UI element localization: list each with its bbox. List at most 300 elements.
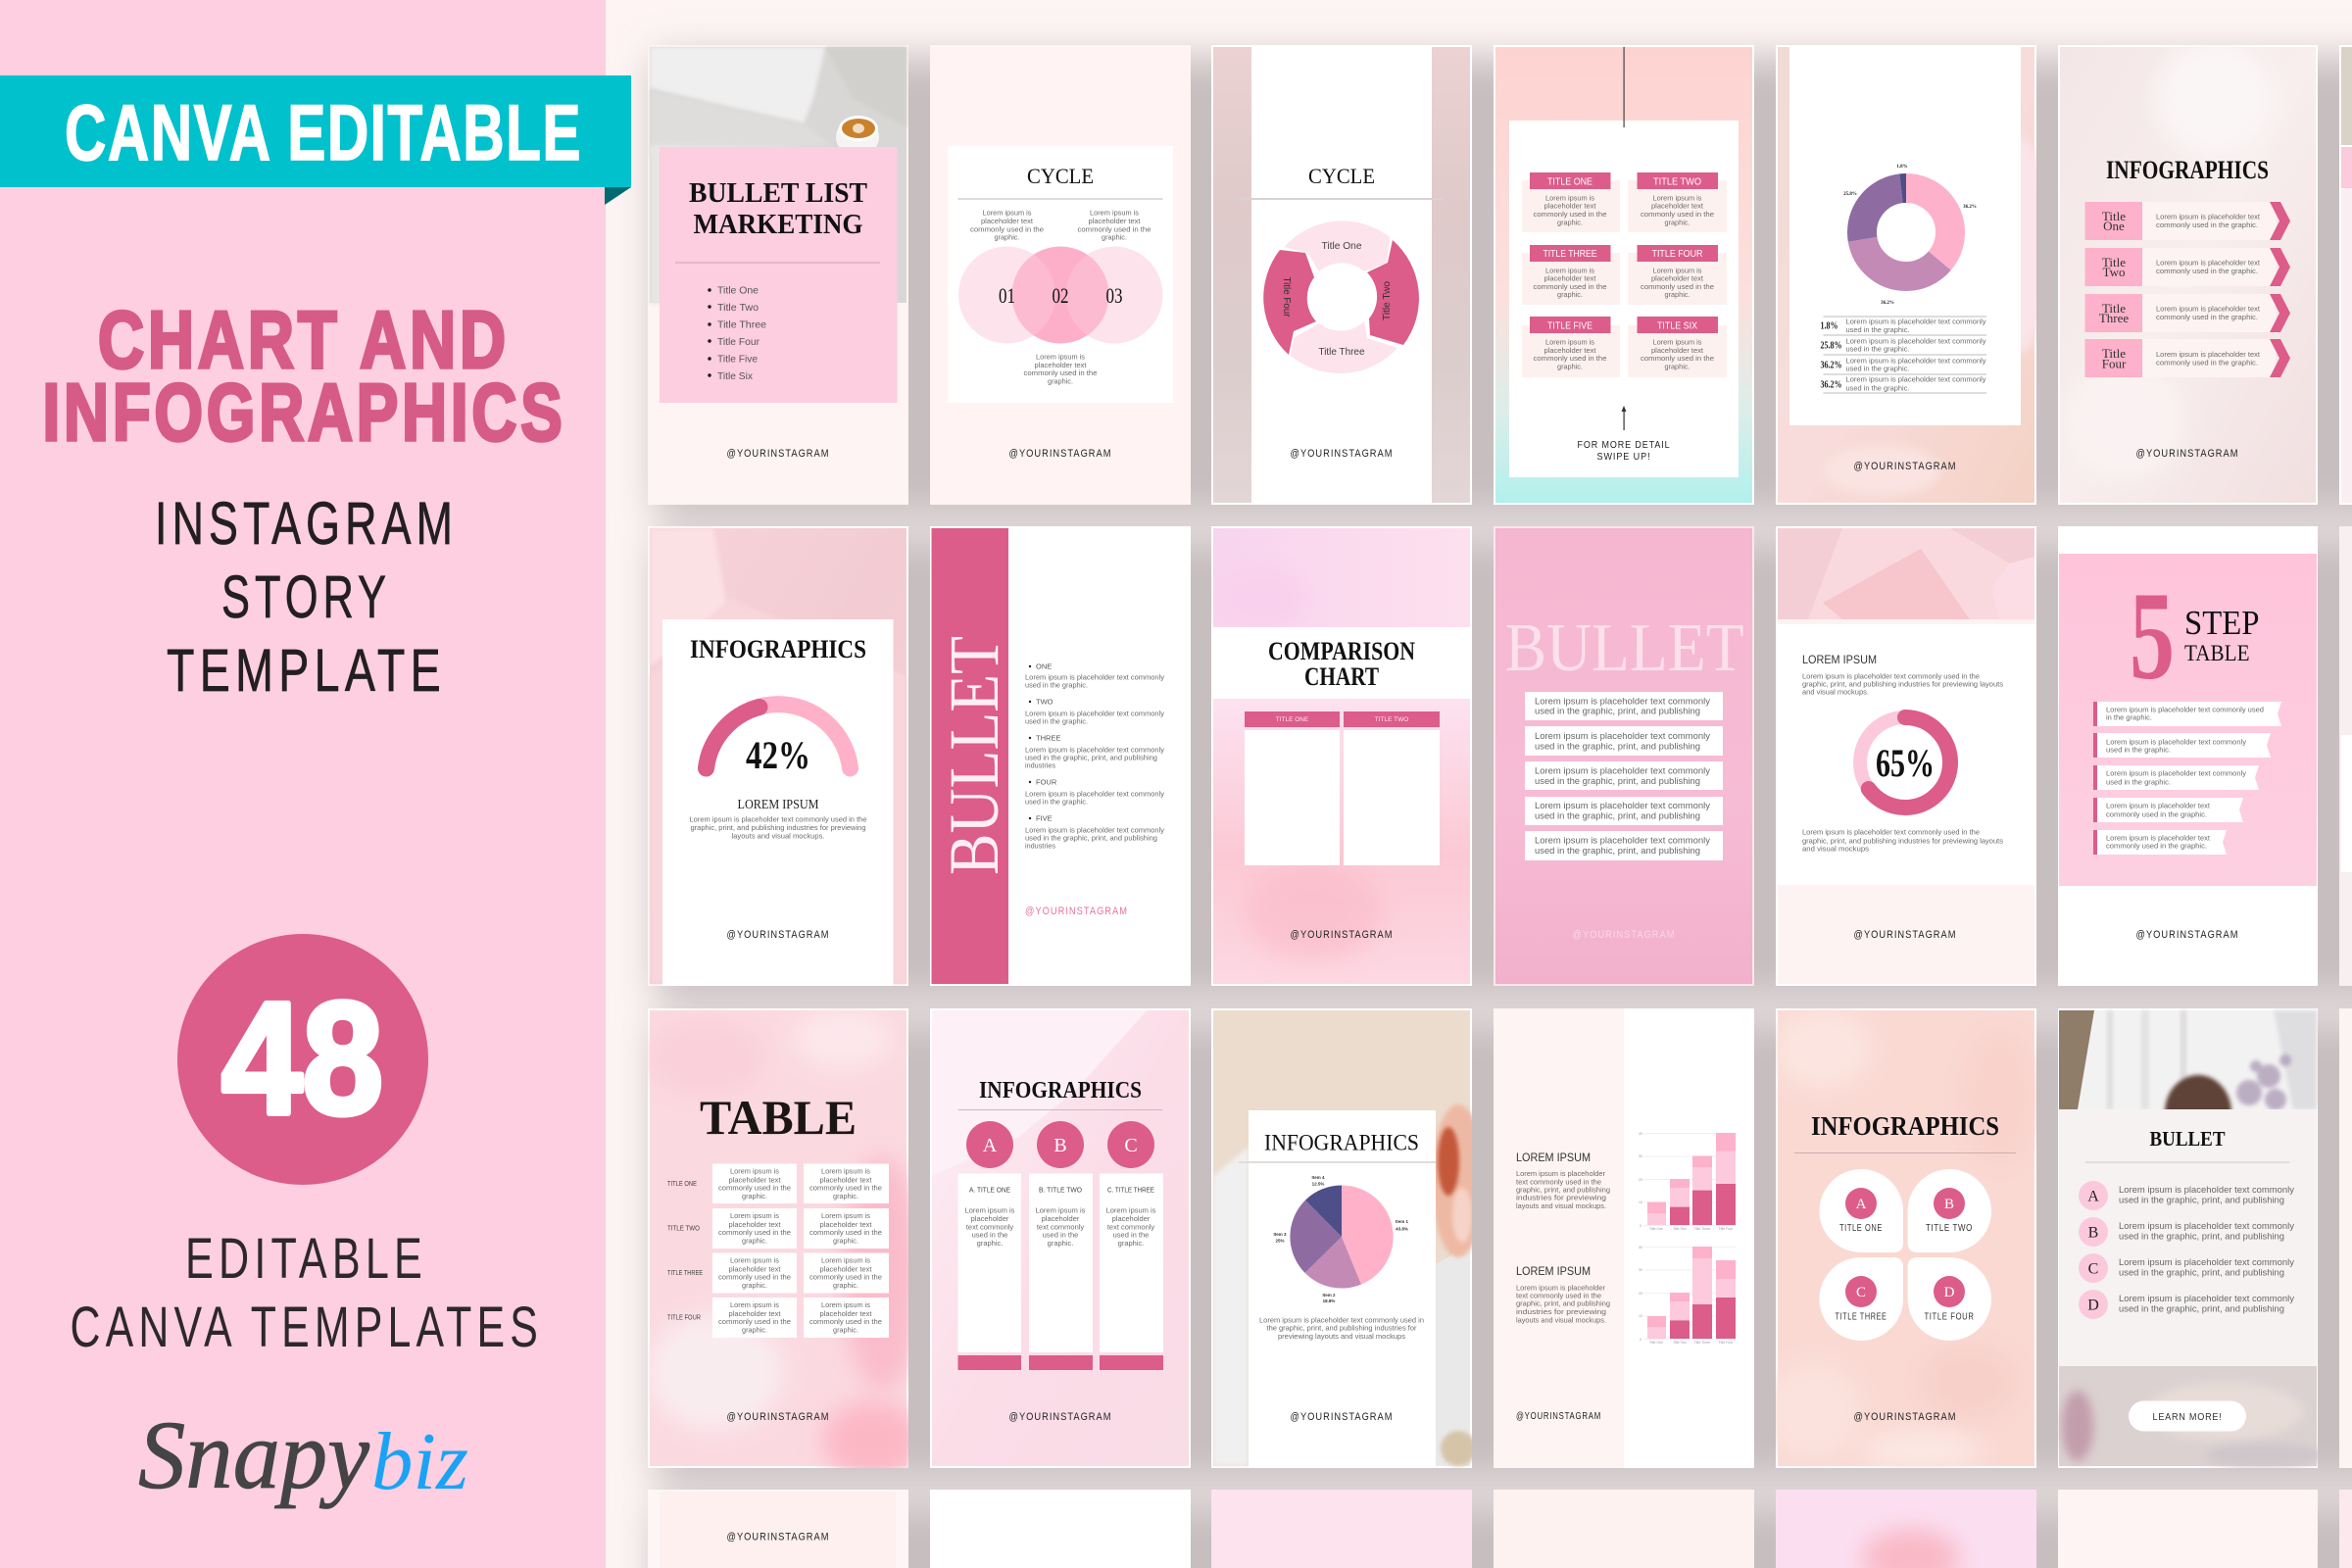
panel: template 3 arrow cycle	[1211, 45, 1472, 505]
six title cards: graphic.	[1664, 290, 1690, 299]
peach photo background	[1778, 47, 2050, 503]
bed photo	[2059, 1366, 2323, 1467]
table cells: commonly used in the	[809, 1272, 882, 1282]
description	[1259, 1315, 1424, 1341]
description top	[1802, 672, 2003, 696]
six title cards: TITLE TWO	[1653, 176, 1701, 188]
soft pink background	[932, 1010, 1189, 1466]
bullet list: Title One	[717, 286, 759, 296]
bullet list: FOUR	[1036, 778, 1057, 786]
table cells: commonly used in the	[718, 1184, 791, 1192]
table cells: graphic.	[742, 1192, 767, 1200]
panel: template 11 ring 65 percent	[1776, 526, 2036, 986]
three columns: placeholder	[971, 1214, 1009, 1223]
footer band	[1778, 885, 2034, 984]
comparison table	[1245, 711, 1440, 865]
arrow rows: Title	[2102, 346, 2126, 361]
title: INFOGRAPHICS	[1811, 1111, 1999, 1141]
table cells: placeholder text	[729, 1309, 781, 1318]
lettered rows: B	[2088, 1225, 2098, 1241]
stacked bar chart one: 0	[1640, 1224, 1642, 1228]
table cells: commonly used in the	[718, 1228, 791, 1237]
text blocks: placeholder text	[1035, 361, 1087, 369]
lettered rows: C	[2088, 1260, 2098, 1278]
table cells: commonly used in the	[718, 1317, 791, 1326]
bullet list: used in the graphic, print, and publishing	[1025, 753, 1157, 762]
title	[689, 177, 867, 240]
panel: row 4 template 2	[930, 1490, 1191, 1568]
text rows: Lorem ipsum is placeholder text commonly	[1535, 696, 1710, 708]
six title cards: TITLE FIVE	[1547, 321, 1592, 331]
panel: template 2 venn cycle	[930, 45, 1191, 505]
six title cards: graphic.	[1664, 218, 1690, 227]
title: BULLET	[2150, 1127, 2225, 1151]
bullet list: Title Three	[717, 319, 766, 331]
six title cards: commonly used in the	[1641, 210, 1714, 219]
pie labels	[1273, 1175, 1408, 1303]
text rows: Lorem ipsum is placeholder text commonly	[1535, 835, 1710, 847]
description: layouts and visual mockups.	[731, 831, 825, 841]
six title cards: commonly used in the	[1641, 282, 1714, 291]
watercolor backgrounds	[1213, 528, 1470, 984]
title: INFOGRAPHICS	[690, 635, 866, 663]
arrow rows: Four	[2102, 357, 2127, 370]
badge: 48 templates	[177, 934, 428, 1185]
six title cards: Lorem ipsum is	[1545, 194, 1594, 202]
subheading: instagram story template: STORY	[221, 564, 391, 630]
flag rows: in the graphic.	[2106, 713, 2152, 721]
text blocks: commonly used in the	[1078, 225, 1151, 233]
text rows: used in the graphic, print, and publishing	[1535, 741, 1700, 753]
silk background	[2060, 39, 2316, 503]
stacked bar chart one: 30	[1639, 1154, 1642, 1158]
stacked bar chart one: 20	[1639, 1178, 1642, 1182]
legend table: Lorem ipsum is placeholder text commonly	[1846, 374, 1986, 384]
three columns: text commonly	[1107, 1223, 1154, 1231]
lettered rows: used in the graphic, print, and publishing	[2119, 1196, 2284, 1205]
stacked bar chart one: Title One	[1649, 1227, 1663, 1231]
panel: template 1 bullet list marketing	[648, 45, 908, 505]
segmented cycle donut: Title One	[1321, 241, 1362, 252]
bullet list: Lorem ipsum is placeholder text commonly	[1025, 825, 1164, 835]
heading: chart and infographics	[43, 294, 566, 458]
bullet list: used in the graphic.	[1025, 717, 1088, 725]
stacked bar chart two: Title Three	[1694, 1341, 1710, 1345]
three columns: placeholder	[1042, 1214, 1080, 1223]
text blocks	[970, 208, 1151, 386]
handle: @YOURINSTAGRAM	[1290, 1411, 1394, 1423]
petal cards: B	[1944, 1197, 1954, 1212]
comparison table: TITLE TWO	[1375, 716, 1408, 723]
six title cards: Lorem ipsum is	[1652, 337, 1702, 347]
text: editable canva templates: EDITABLE	[185, 1227, 427, 1291]
venn diagram	[958, 247, 1162, 343]
six title cards: TITLE SIX	[1657, 321, 1697, 331]
petal cards: TITLE FOUR	[1925, 1311, 1974, 1323]
lettered rows: used in the graphic, print, and publishing	[2119, 1303, 2284, 1315]
arrow rows: Lorem ipsum is placeholder text	[2156, 259, 2261, 267]
table cells: commonly used in the	[718, 1272, 791, 1282]
panel: partial template column right row 3	[2339, 1008, 2352, 1468]
legend table: Lorem ipsum is placeholder text commonly	[1846, 318, 1986, 325]
legend table: used in the graphic.	[1846, 345, 1909, 353]
handle: @YOURINSTAGRAM	[1854, 461, 1956, 472]
bullet list: used in the graphic.	[1025, 680, 1088, 690]
vertical title: BULLET	[935, 636, 1013, 875]
pie labels: 18.8%	[1323, 1298, 1335, 1303]
text rows: used in the graphic, print, and publishing	[1535, 811, 1700, 821]
text blocks: graphic.	[994, 233, 1019, 241]
six title cards: commonly used in the	[1533, 210, 1607, 219]
description top: graphic, print, and publishing industries for previewing layouts	[1802, 680, 2003, 688]
gauge value: 42%	[746, 733, 810, 777]
six title cards: TITLE ONE	[1547, 176, 1592, 188]
six title cards: graphic.	[1557, 290, 1583, 299]
three columns: Lorem ipsum is	[1106, 1205, 1156, 1215]
six title cards: commonly used in the	[1533, 282, 1607, 291]
ribbon banner: CANVA EDITABLE	[65, 89, 582, 177]
legend table: 1.8%	[1821, 321, 1838, 331]
six title cards: graphic.	[1557, 218, 1583, 227]
table cells: graphic.	[833, 1192, 858, 1200]
subheading: instagram story template: TEMPLATE	[167, 637, 446, 704]
title: COMPARISON	[1268, 637, 1415, 665]
six title cards: Lorem ipsum is	[1652, 267, 1702, 274]
table cells: graphic.	[742, 1325, 767, 1335]
letter circles	[966, 1121, 1154, 1168]
arrow rows: commonly used in the graphic.	[2156, 359, 2258, 367]
table cells: placeholder text	[819, 1309, 872, 1318]
subheading: instagram story template: INSTAGRAM	[155, 490, 458, 557]
six title cards: TITLE THREE	[1543, 249, 1597, 260]
sand photo strips	[1213, 47, 1470, 503]
subheading: instagram story template	[155, 490, 458, 704]
title: TABLE	[2184, 641, 2250, 665]
arrow rows: Lorem ipsum is placeholder text	[2156, 350, 2261, 359]
pie labels: Item 2	[1322, 1293, 1336, 1298]
table cells: Lorem ipsum is	[730, 1211, 779, 1220]
bullet list: Lorem ipsum is placeholder text commonly	[1025, 745, 1164, 755]
flag rows: commonly used in the graphic.	[2106, 841, 2207, 851]
swipe up text: SWIPE UP!	[1597, 452, 1650, 463]
row labels: TITLE ONE	[667, 1181, 697, 1188]
bullet list	[708, 286, 766, 382]
six title cards: placeholder text	[1651, 346, 1704, 355]
title: INFOGRAPHICS	[2106, 156, 2269, 184]
six title cards	[1522, 172, 1727, 377]
six title cards: commonly used in the	[1533, 354, 1607, 363]
table cells: Lorem ipsum is	[821, 1300, 870, 1309]
handle: @YOURINSTAGRAM	[1009, 448, 1111, 460]
bullet list: ONE	[1036, 662, 1052, 670]
text block two: layouts and visual mockups.	[1516, 1315, 1606, 1325]
table cells: commonly used in the	[809, 1228, 882, 1237]
lettered rows: D	[2087, 1298, 2099, 1313]
description bottom: and visual mockups	[1802, 845, 1869, 853]
title: CYCLE	[1308, 164, 1375, 188]
segmented cycle donut: Title Two	[1382, 281, 1393, 320]
arrow rows: commonly used in the graphic.	[2156, 313, 2258, 321]
table cells: placeholder text	[729, 1220, 781, 1229]
legend table	[1821, 316, 1986, 394]
table cells: graphic.	[833, 1237, 858, 1245]
legend table: Lorem ipsum is placeholder text commonly	[1846, 337, 1986, 345]
six title cards: commonly used in the	[1641, 354, 1714, 363]
text: editable canva templates	[71, 1227, 543, 1359]
description top: Lorem ipsum is placeholder text commonly used in the	[1802, 672, 1980, 680]
text blocks: commonly used in the	[970, 225, 1044, 233]
text block two: industries for previewing	[1516, 1307, 1606, 1316]
flag rows: Lorem ipsum is placeholder text	[2106, 833, 2211, 843]
handle: @YOURINSTAGRAM	[727, 1411, 829, 1423]
pie labels: Item 1	[1396, 1219, 1408, 1224]
panel: template 15 pie chart	[1211, 1008, 1472, 1468]
panel: row 4 template 6	[2058, 1490, 2318, 1568]
stacked bar chart one	[1639, 1132, 1736, 1231]
venn diagram: 02	[1053, 283, 1068, 308]
table cells: placeholder text	[819, 1264, 872, 1274]
petal cards: A	[1856, 1197, 1867, 1212]
arrow rows: Title	[2102, 255, 2126, 270]
text block one: industries for previewing	[1516, 1194, 1606, 1201]
table cells: Lorem ipsum is	[821, 1211, 870, 1220]
arrow rows: Title	[2102, 209, 2126, 223]
handle: @YOURINSTAGRAM	[1516, 1411, 1601, 1422]
table cells: graphic.	[742, 1237, 767, 1245]
text: editable canva templates: CANVA TEMPLATES	[71, 1296, 543, 1359]
stacked bar chart one: 40	[1639, 1132, 1642, 1136]
ring value: 65%	[1876, 741, 1935, 785]
description bottom	[1802, 827, 2003, 853]
panel: template 17 four petals	[1776, 1008, 2036, 1468]
stacked bar chart one: 10	[1639, 1200, 1642, 1204]
inner tinted box	[660, 1492, 896, 1568]
row labels: TITLE THREE	[667, 1270, 703, 1277]
stacked bar chart two: 20	[1639, 1292, 1642, 1296]
stacked bar chart two: 10	[1639, 1314, 1642, 1318]
panel: template 10 bullet on pink	[1494, 526, 1754, 986]
panel: partial template column right row 2	[2339, 526, 2352, 986]
logo: snapybiz: biz	[371, 1416, 468, 1507]
six title cards: graphic.	[1557, 363, 1583, 370]
donut labels: 1.8%	[1896, 165, 1908, 170]
subtitle: LOREM IPSUM	[737, 798, 819, 812]
pie labels: 25%	[1275, 1239, 1285, 1243]
donut labels: 36.2%	[1881, 301, 1894, 306]
text block one: Lorem ipsum is placeholder	[1516, 1169, 1605, 1178]
description	[690, 815, 866, 841]
lettered rows	[2079, 1181, 2294, 1319]
three columns: graphic.	[977, 1239, 1003, 1248]
bullet list: Title Five	[717, 355, 758, 365]
description: Lorem ipsum is placeholder text commonly used in the	[690, 815, 866, 823]
arrow rows: Two	[2103, 265, 2125, 279]
panel: template 16 bar charts	[1494, 1008, 1754, 1468]
pink background	[1495, 528, 1752, 984]
text blocks: Lorem ipsum is	[982, 208, 1032, 218]
donut labels: 25.8%	[1843, 192, 1857, 197]
text blocks: Lorem ipsum is	[1090, 208, 1139, 218]
watercolor stroke	[1862, 1529, 1960, 1568]
three columns: used in the	[972, 1231, 1007, 1239]
handle: @YOURINSTAGRAM	[1290, 448, 1394, 460]
stacked bar chart two: 40	[1639, 1246, 1642, 1250]
text block one: LOREM IPSUM	[1516, 1151, 1591, 1164]
description: previewing layouts and visual mockups	[1278, 1332, 1405, 1341]
table cells: placeholder text	[729, 1264, 781, 1274]
feather background	[1764, 1009, 2038, 1470]
three columns	[958, 1174, 1163, 1370]
table cells: Lorem ipsum is	[730, 1166, 779, 1176]
row labels: TITLE TWO	[667, 1225, 700, 1233]
white content box	[662, 619, 894, 986]
flag rows: Lorem ipsum is placeholder text commonly	[2106, 737, 2246, 747]
stacked bar chart one: Title Three	[1694, 1227, 1710, 1231]
card drop shadows	[655, 57, 2352, 1568]
text rows: used in the graphic, print, and publishing	[1535, 706, 1700, 717]
pink smoke background	[647, 1009, 921, 1480]
text rows: Lorem ipsum is placeholder text commonly	[1535, 801, 1710, 811]
table cells: placeholder text	[819, 1220, 872, 1229]
panel: row 4 partial template	[2339, 1490, 2352, 1568]
donut chart	[1862, 188, 1950, 276]
heading: LOREM IPSUM	[1802, 653, 1877, 666]
panel: row 4 template 5	[1776, 1490, 2036, 1568]
handle: @YOURINSTAGRAM	[2136, 448, 2238, 460]
legend table: 25.8%	[1821, 341, 1842, 351]
table cells: commonly used in the	[809, 1317, 882, 1326]
pink band	[931, 528, 1008, 984]
text rows: used in the graphic, print, and publishing	[1535, 776, 1700, 787]
text rows: Lorem ipsum is placeholder text commonly	[1535, 766, 1710, 776]
handle: @YOURINSTAGRAM	[1854, 1411, 1956, 1423]
ribbon banner	[0, 75, 631, 187]
panel: row 4 template 3	[1211, 1490, 1472, 1568]
venn diagram: 01	[999, 283, 1015, 308]
text rows: used in the graphic, print, and publishing	[1535, 846, 1700, 857]
bullet list	[1025, 662, 1164, 851]
three columns: used in the	[1113, 1231, 1149, 1239]
handle: @YOURINSTAGRAM	[727, 1531, 829, 1543]
six title cards: placeholder text	[1544, 274, 1596, 282]
swipe up text	[1578, 440, 1670, 463]
segmented cycle donut: Title Four	[1281, 276, 1292, 318]
gradient background	[1495, 47, 1752, 503]
lettered rows: Lorem ipsum is placeholder text commonly	[2119, 1221, 2294, 1232]
title: CYCLE	[1027, 164, 1094, 188]
petal cards: TITLE TWO	[1926, 1223, 1973, 1234]
panel: template 14 three columns	[930, 1008, 1191, 1468]
white content panel	[1249, 1110, 1436, 1468]
six title cards: placeholder text	[1544, 346, 1596, 355]
petal cards: TITLE ONE	[1839, 1223, 1883, 1234]
text block two	[1516, 1264, 1610, 1325]
title: INFOGRAPHICS	[979, 1078, 1142, 1103]
description: Lorem ipsum is placeholder text commonly used in	[1259, 1315, 1424, 1325]
three columns: Lorem ipsum is	[965, 1205, 1015, 1215]
segmented cycle donut	[1263, 220, 1419, 373]
text blocks: graphic.	[1102, 233, 1127, 241]
bullet list: industries	[1025, 760, 1055, 770]
marble and towel photo	[1213, 1010, 1485, 1466]
description bottom: graphic, print, and publishing industries for previewing layouts	[1802, 837, 2003, 845]
text block one: text commonly used in the	[1516, 1178, 1601, 1186]
photo: bed and coffee cup	[650, 47, 906, 304]
title	[2184, 604, 2260, 665]
stacked bar chart two: Title Four	[1719, 1341, 1734, 1345]
panel: template 9 comparison chart	[1211, 526, 1472, 986]
six title cards: placeholder text	[1651, 202, 1704, 210]
arrow rows: commonly used in the graphic.	[2156, 220, 2258, 229]
text blocks: placeholder text	[1088, 217, 1141, 225]
handle: @YOURINSTAGRAM	[1290, 929, 1394, 941]
table cells: placeholder text	[819, 1176, 872, 1184]
bullet list: Lorem ipsum is placeholder text commonly	[1025, 710, 1164, 717]
text rows: Lorem ipsum is placeholder text commonly	[1535, 731, 1710, 742]
petal cards: TITLE THREE	[1835, 1311, 1887, 1323]
panel: row 4 template 4	[1494, 1490, 1754, 1568]
donut labels	[1843, 165, 1977, 306]
donut labels: 36.2%	[1963, 205, 1977, 210]
window photo	[2059, 1010, 2317, 1150]
handle: @YOURINSTAGRAM	[727, 448, 829, 460]
arrow up	[1621, 406, 1627, 430]
panel: row 4 template 1	[648, 1490, 908, 1568]
three columns: graphic.	[1118, 1239, 1144, 1248]
bullet list: Lorem ipsum is placeholder text commonly	[1025, 790, 1164, 798]
flag rows: used in the graphic.	[2106, 778, 2171, 786]
six title cards: placeholder text	[1544, 202, 1596, 210]
text block two: Lorem ipsum is placeholder	[1516, 1284, 1605, 1292]
text rows	[1525, 692, 1723, 860]
three columns: C. TITLE THREE	[1107, 1188, 1154, 1194]
handle: @YOURINSTAGRAM	[1009, 1411, 1111, 1423]
table cells: Lorem ipsum is	[730, 1300, 779, 1309]
lettered rows: Lorem ipsum is placeholder text commonly	[2119, 1294, 2294, 1304]
legend table: used in the graphic.	[1846, 365, 1909, 372]
title: INFOGRAPHICS	[1264, 1131, 1419, 1154]
legend table: 36.2%	[1821, 361, 1842, 370]
arrow rows: One	[2103, 219, 2125, 233]
stacked bar chart two: Title One	[1649, 1341, 1663, 1345]
pie labels: 12.5%	[1312, 1182, 1324, 1186]
table cells: Lorem ipsum is	[730, 1256, 779, 1264]
lettered rows: used in the graphic, print, and publishing	[2119, 1268, 2284, 1278]
pie labels: Item 3	[1273, 1232, 1287, 1237]
lettered rows: A	[2087, 1188, 2099, 1205]
heading: chart and infographics: INFOGRAPHICS	[43, 367, 566, 458]
venn diagram: 03	[1105, 283, 1123, 308]
bullet list: Title Four	[717, 337, 760, 348]
description: graphic, print, and publishing industries for previewing	[690, 823, 866, 832]
segmented cycle donut: Title Three	[1319, 347, 1365, 358]
text block one	[1516, 1151, 1610, 1210]
six title cards: Lorem ipsum is	[1652, 194, 1702, 202]
panel: template 18 lettered bullets with photo	[2058, 1008, 2318, 1468]
bullet list: Lorem ipsum is placeholder text commonly	[1025, 672, 1164, 682]
bullet list: THREE	[1036, 733, 1060, 743]
panel: template 4 six titles	[1494, 45, 1754, 505]
white title band	[1213, 627, 1470, 699]
ring chart	[1860, 717, 1950, 808]
pink stationery photo	[1778, 528, 2034, 624]
title: MARKETING	[694, 209, 862, 240]
table cells: Lorem ipsum is	[821, 1166, 870, 1176]
six title cards: graphic.	[1664, 363, 1690, 370]
table cells	[712, 1164, 889, 1338]
description bottom: Lorem ipsum is placeholder text commonly used in the	[1802, 827, 1980, 837]
stacked bar chart one: Title Two	[1673, 1227, 1687, 1231]
